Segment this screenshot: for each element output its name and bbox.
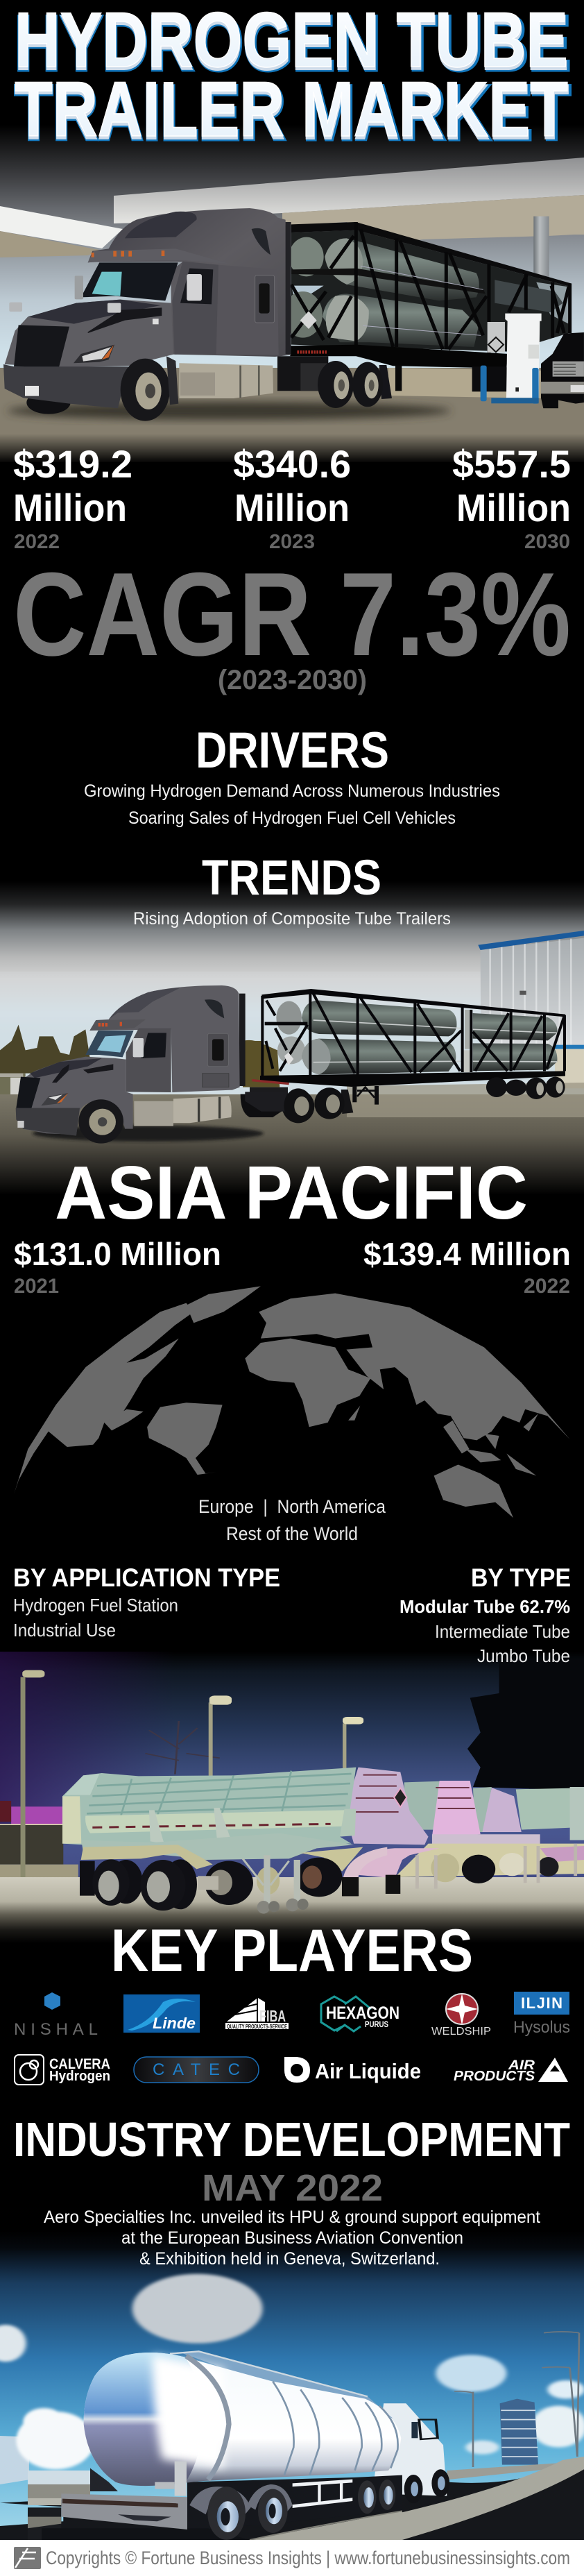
value 2023	[233, 442, 351, 553]
logo: Air Liquide: Air Liquide	[315, 2059, 421, 2083]
photo: tanker truck on highway	[0, 2231, 584, 2540]
by application type: Industrial Use	[13, 1620, 116, 1641]
value 2022: $319.2	[13, 442, 132, 486]
logo: Calvera Hydrogen	[15, 2055, 110, 2085]
logo: Weldship: WELDSHIP	[431, 2026, 491, 2037]
logo: Linde	[123, 1994, 200, 2033]
value 2022	[13, 442, 132, 553]
region value 2022: 2022	[524, 1275, 570, 1298]
key players heading: KEY PLAYERS	[111, 1917, 473, 1984]
logo: Iljin Hysolus: Hysolus	[513, 2018, 570, 2037]
logo: Nishal: NISHAL	[14, 2020, 98, 2039]
value 2030: $557.5	[452, 442, 571, 486]
by type: Jumbo Tube	[477, 1645, 570, 1666]
logo: Air Products	[454, 2058, 568, 2084]
map caption: Europe | North America	[198, 1496, 386, 1517]
development description	[44, 2208, 540, 2269]
logo: FIBA: FIBA	[259, 2007, 286, 2025]
logo: Hexagon Purus: PURUS	[365, 2019, 388, 2029]
by type: BY TYPE	[471, 1564, 571, 1592]
logo: Hexagon Purus	[321, 1997, 400, 2031]
logo: Catec: CATEC	[153, 2060, 240, 2079]
market values row	[13, 442, 571, 553]
map caption: Rest of the World	[226, 1523, 358, 1544]
logo: Catec	[134, 2057, 259, 2083]
value 2030: 2030	[524, 531, 570, 553]
by type: Intermediate Tube	[435, 1621, 570, 1642]
map caption	[198, 1496, 386, 1544]
drivers list	[84, 781, 500, 828]
photo: night trailers	[0, 1652, 584, 1943]
date: MAY 2022	[202, 2167, 383, 2209]
by application type: Hydrogen Fuel Station	[13, 1595, 178, 1616]
world map	[14, 1286, 570, 1518]
value 2023: Million	[234, 486, 350, 529]
region value 2021: $131.0 Million	[14, 1236, 221, 1272]
logo: FIBA: QUALITY PRODUCTS-SERVICE	[227, 2024, 287, 2030]
value 2023: $340.6	[233, 442, 351, 486]
region heading: ASIA PACIFIC	[55, 1151, 528, 1235]
value 2030: Million	[456, 486, 571, 529]
logo: FIBA	[225, 1998, 289, 2030]
value 2030	[452, 442, 571, 553]
key player logos	[14, 1992, 570, 2085]
logo: Weldship	[431, 1994, 491, 2037]
value 2022: 2022	[14, 531, 60, 553]
value 2023: 2023	[269, 531, 315, 553]
region value 2022	[363, 1236, 571, 1298]
logo: Iljin Hysolus: ILJIN	[521, 1994, 562, 2012]
CAGR period: (2023-2030)	[218, 665, 367, 695]
logo: Iljin Hysolus	[513, 1992, 570, 2037]
title	[15, 0, 571, 156]
development description: & Exhibition held in Geneva, Switzerland.	[139, 2249, 440, 2269]
logo: Air Liquide	[284, 2057, 421, 2083]
logo: Nishal	[14, 1992, 98, 2039]
drivers heading: DRIVERS	[196, 722, 389, 779]
photo: truck at hydrogen fuel station	[0, 0, 584, 464]
logo: Calvera Hydrogen: CALVERA	[49, 2056, 110, 2072]
region value 2021: 2021	[14, 1275, 59, 1298]
drivers list: Growing Hydrogen Demand Across Numerous Industries	[84, 781, 500, 801]
photo: truck with composite tube trailer	[0, 881, 584, 1195]
by application type	[13, 1564, 280, 1641]
logo: Air Products: AIR	[508, 2058, 535, 2073]
trends heading: TRENDS	[202, 851, 381, 906]
value 2022: Million	[13, 486, 127, 529]
logo: Hexagon Purus: HEXAGON	[326, 2003, 400, 2023]
by type: Modular Tube 62.7%	[400, 1596, 570, 1617]
trends list: Rising Adoption of Composite Tube Trailers	[133, 909, 451, 929]
development description: at the European Business Aviation Convention	[121, 2228, 463, 2248]
footer	[0, 2540, 584, 2576]
region value 2022: $139.4 Million	[363, 1236, 571, 1272]
drivers list: Soaring Sales of Hydrogen Fuel Cell Vehicles	[128, 808, 456, 828]
logo: Air Products: PRODUCTS	[454, 2069, 535, 2084]
development description: Aero Specialties Inc. unveiled its HPU & ground support equipment	[44, 2208, 540, 2227]
footer logo	[14, 2547, 41, 2569]
by type	[400, 1564, 571, 1666]
by application type: BY APPLICATION TYPE	[13, 1564, 280, 1592]
logo: Linde: Linde	[153, 2015, 196, 2032]
region value 2021	[14, 1236, 221, 1298]
logo: Calvera Hydrogen: Hydrogen	[49, 2069, 110, 2084]
